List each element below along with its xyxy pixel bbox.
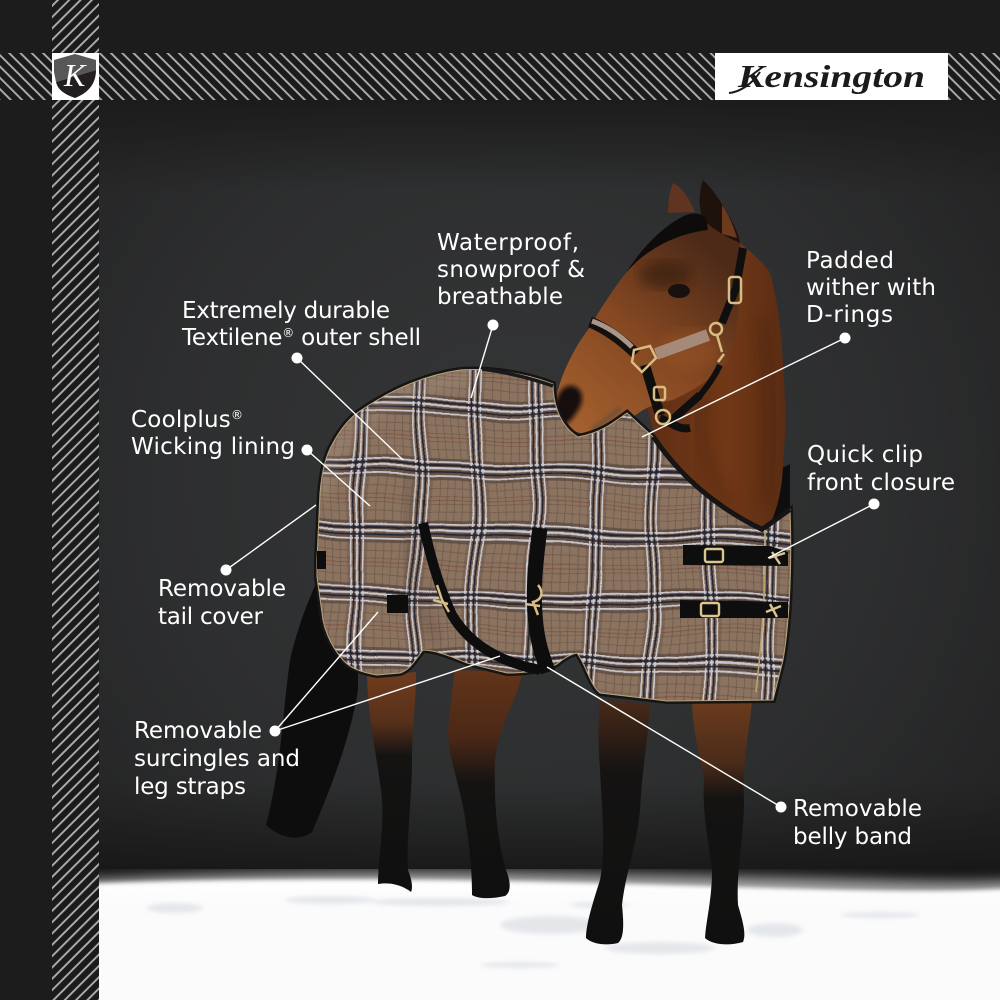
chest buckles <box>701 549 785 617</box>
callout: outer shell: Extremely durable <box>182 298 390 324</box>
callout: outer shell: Textilene <box>182 325 282 351</box>
callout: belly band <box>547 667 922 850</box>
near ear inner <box>722 205 737 238</box>
jaw straps <box>660 395 700 428</box>
callout: outer shell: outer shell <box>294 325 421 351</box>
callout: front closure <box>768 442 955 558</box>
callout: tail cover <box>158 505 316 630</box>
mouth line <box>592 408 620 430</box>
striped vertical band <box>52 0 99 1000</box>
callout: waterproof: Waterproof, <box>437 230 579 256</box>
belly surcingle <box>534 528 548 672</box>
near hind leg <box>367 672 416 892</box>
callout: waterproof <box>437 230 585 398</box>
rear surcingle <box>423 523 540 670</box>
callout: belly band: Removable <box>793 796 922 822</box>
blanket shading <box>320 375 480 500</box>
cheek highlight <box>660 330 720 370</box>
chest strap upper <box>683 545 788 566</box>
eye <box>668 284 690 298</box>
striped horizontal band <box>0 53 1000 100</box>
neck <box>640 243 785 526</box>
tail cover patch <box>317 551 326 569</box>
brand logo: Kensington: Kensington <box>737 58 925 94</box>
callout: surcingles <box>134 612 500 800</box>
surcingle clips <box>433 585 541 615</box>
callout: surcingles: Removable <box>134 718 262 744</box>
callout: waterproof: snowproof & <box>437 257 585 283</box>
withers strap <box>482 369 553 386</box>
chest strap lower <box>680 600 788 618</box>
muzzle shading <box>555 386 582 424</box>
head <box>555 221 740 435</box>
forelock and mane <box>626 214 708 273</box>
callout: front closure: front closure <box>807 470 955 496</box>
halter <box>590 248 743 438</box>
callout: tail cover: Removable <box>158 576 286 602</box>
callout: front closure: Quick clip <box>807 442 923 468</box>
callout: wither <box>642 248 936 437</box>
callout: waterproof: breathable <box>437 284 563 310</box>
brand mark: K shield: K <box>63 57 87 93</box>
callout: lining: ® <box>231 408 243 422</box>
callout: wither: D-rings <box>806 302 893 328</box>
chest lining <box>766 464 790 528</box>
callout: outer shell <box>181 298 421 460</box>
callout: lining: Coolplus <box>131 407 231 433</box>
rear patch <box>387 595 408 613</box>
left fore leg <box>586 700 650 944</box>
callout: wither: Padded <box>806 248 894 274</box>
callout: surcingles: surcingles and <box>134 746 300 772</box>
right fore leg <box>692 698 752 944</box>
callout: lining: Wicking lining <box>131 434 295 460</box>
neck shading <box>701 320 769 505</box>
callout: outer shell: ® <box>282 326 294 340</box>
callout: lining <box>131 407 370 506</box>
blanket <box>314 366 794 704</box>
forehead shading <box>639 261 691 289</box>
tail <box>266 565 358 838</box>
brand logo: Kensington <box>715 53 948 100</box>
far hind leg <box>448 670 522 898</box>
callout: belly band: belly band <box>793 824 912 850</box>
far ear <box>668 183 695 213</box>
callout: surcingles: leg straps <box>134 774 246 800</box>
front closure edge <box>756 530 765 692</box>
brand mark: K shield <box>52 53 99 100</box>
neckline binding <box>653 437 790 530</box>
callout: tail cover: tail cover <box>158 604 264 630</box>
snow ground <box>80 872 1000 1000</box>
horse <box>266 180 820 944</box>
near ear <box>700 180 740 243</box>
callout: wither: wither with <box>806 275 936 301</box>
